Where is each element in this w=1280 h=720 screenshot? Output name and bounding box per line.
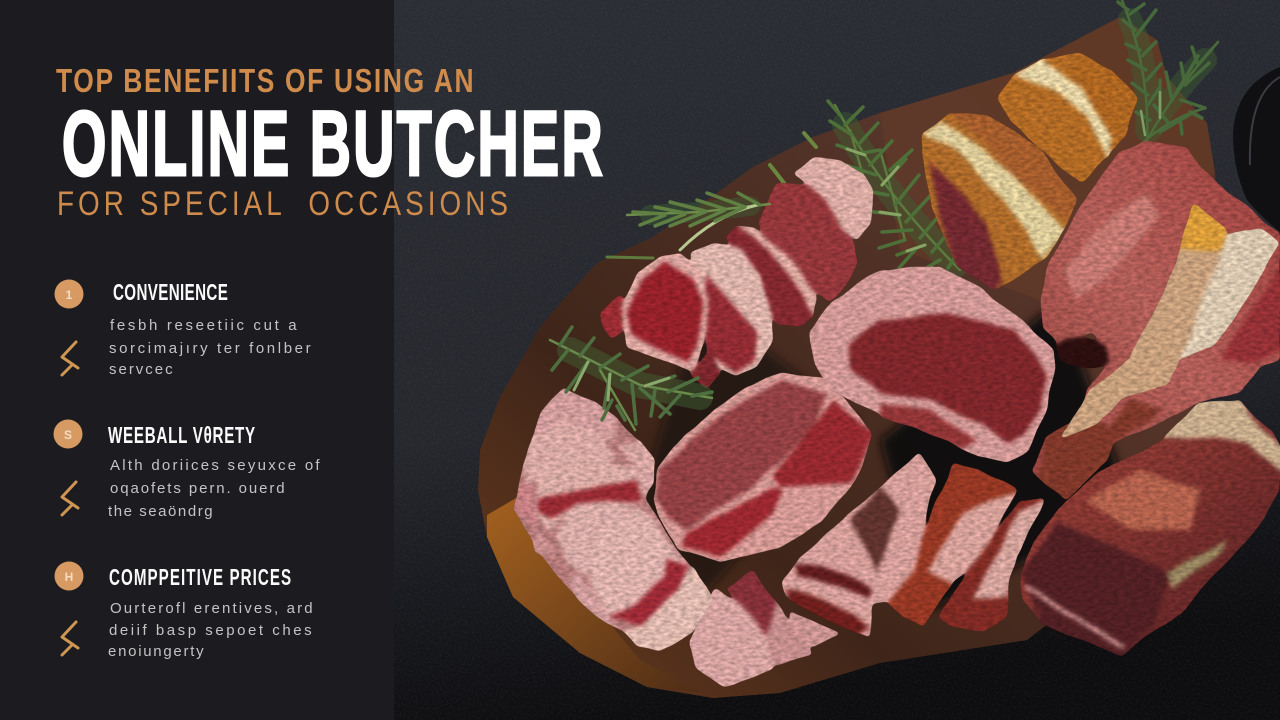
title <box>56 63 603 223</box>
description: oqaofets pern. ouerd <box>110 480 286 497</box>
rosemary sprig: upper left <box>607 193 770 258</box>
dark hollow <box>1055 338 1108 368</box>
rosemary sprig: lower left <box>550 327 712 430</box>
bottom pink slices <box>690 570 842 687</box>
benefit: variety <box>54 420 321 520</box>
description: deiif basp sepoet ches <box>109 622 313 639</box>
light highlight <box>1065 195 1160 300</box>
benefit: convenience <box>54 280 312 378</box>
description: Alth doriices seyuxce of <box>110 457 321 474</box>
roast: upper rear joint <box>997 52 1137 182</box>
wooden board <box>478 17 1225 698</box>
title line three: FOR SPECIAL OCCASIONS <box>57 184 508 223</box>
ribs: three cut chops <box>783 453 1045 637</box>
description <box>108 457 321 520</box>
benefit: competitive prices <box>54 562 314 660</box>
left panel <box>0 0 394 720</box>
top row of fillet slices <box>600 158 873 390</box>
icon: chevron <box>62 342 78 375</box>
large roast: bottom right <box>1022 400 1280 655</box>
number badge: H <box>65 570 73 584</box>
heading: CONVENIENCE <box>113 280 228 306</box>
title main: ONLINE BUTCHER <box>62 93 603 195</box>
rosemary sprig: top centre <box>770 101 962 274</box>
icon: pan handle <box>1233 67 1280 232</box>
title line one: TOP BENEFIITS OF USING AN <box>56 63 474 100</box>
lean stripe <box>538 480 641 518</box>
description: Ourterofl erentives, ard <box>110 600 314 617</box>
dark lean on right <box>1220 267 1280 363</box>
description: fesbh reseetiic cut a <box>110 317 298 334</box>
cut face <box>930 160 1002 289</box>
number badge: 1 <box>66 288 73 302</box>
rosemary sprig: top right <box>1118 0 1218 150</box>
centre lower steak <box>653 372 873 562</box>
fat cap <box>1163 400 1280 473</box>
leg joint <box>1030 140 1280 500</box>
description <box>109 317 312 378</box>
number badge <box>54 562 84 590</box>
number badge <box>54 420 82 448</box>
number badge: S <box>64 428 72 442</box>
cream band <box>923 122 1063 258</box>
icon: chevron <box>62 482 78 515</box>
heading: COMPPEITIVE PRICES <box>109 565 291 591</box>
heading: WEEBALL VθRETY <box>108 423 255 449</box>
roast: front joint with cut face <box>922 113 1077 289</box>
description: servcec <box>109 361 174 378</box>
lower shank <box>1037 400 1163 500</box>
ham slices <box>513 388 713 652</box>
cream band <box>1015 58 1112 160</box>
bone and fat bands <box>1060 203 1280 440</box>
cut face <box>1023 523 1170 655</box>
icon: chevron <box>62 622 78 655</box>
description: enoiungerty <box>108 643 205 660</box>
centre large steak <box>808 267 1055 462</box>
number badge <box>54 280 84 308</box>
description <box>108 600 314 660</box>
description: the seaöndrg <box>108 503 214 520</box>
description: sorcimajıry ter fonlber <box>109 340 312 357</box>
crust highlight <box>1085 470 1200 530</box>
